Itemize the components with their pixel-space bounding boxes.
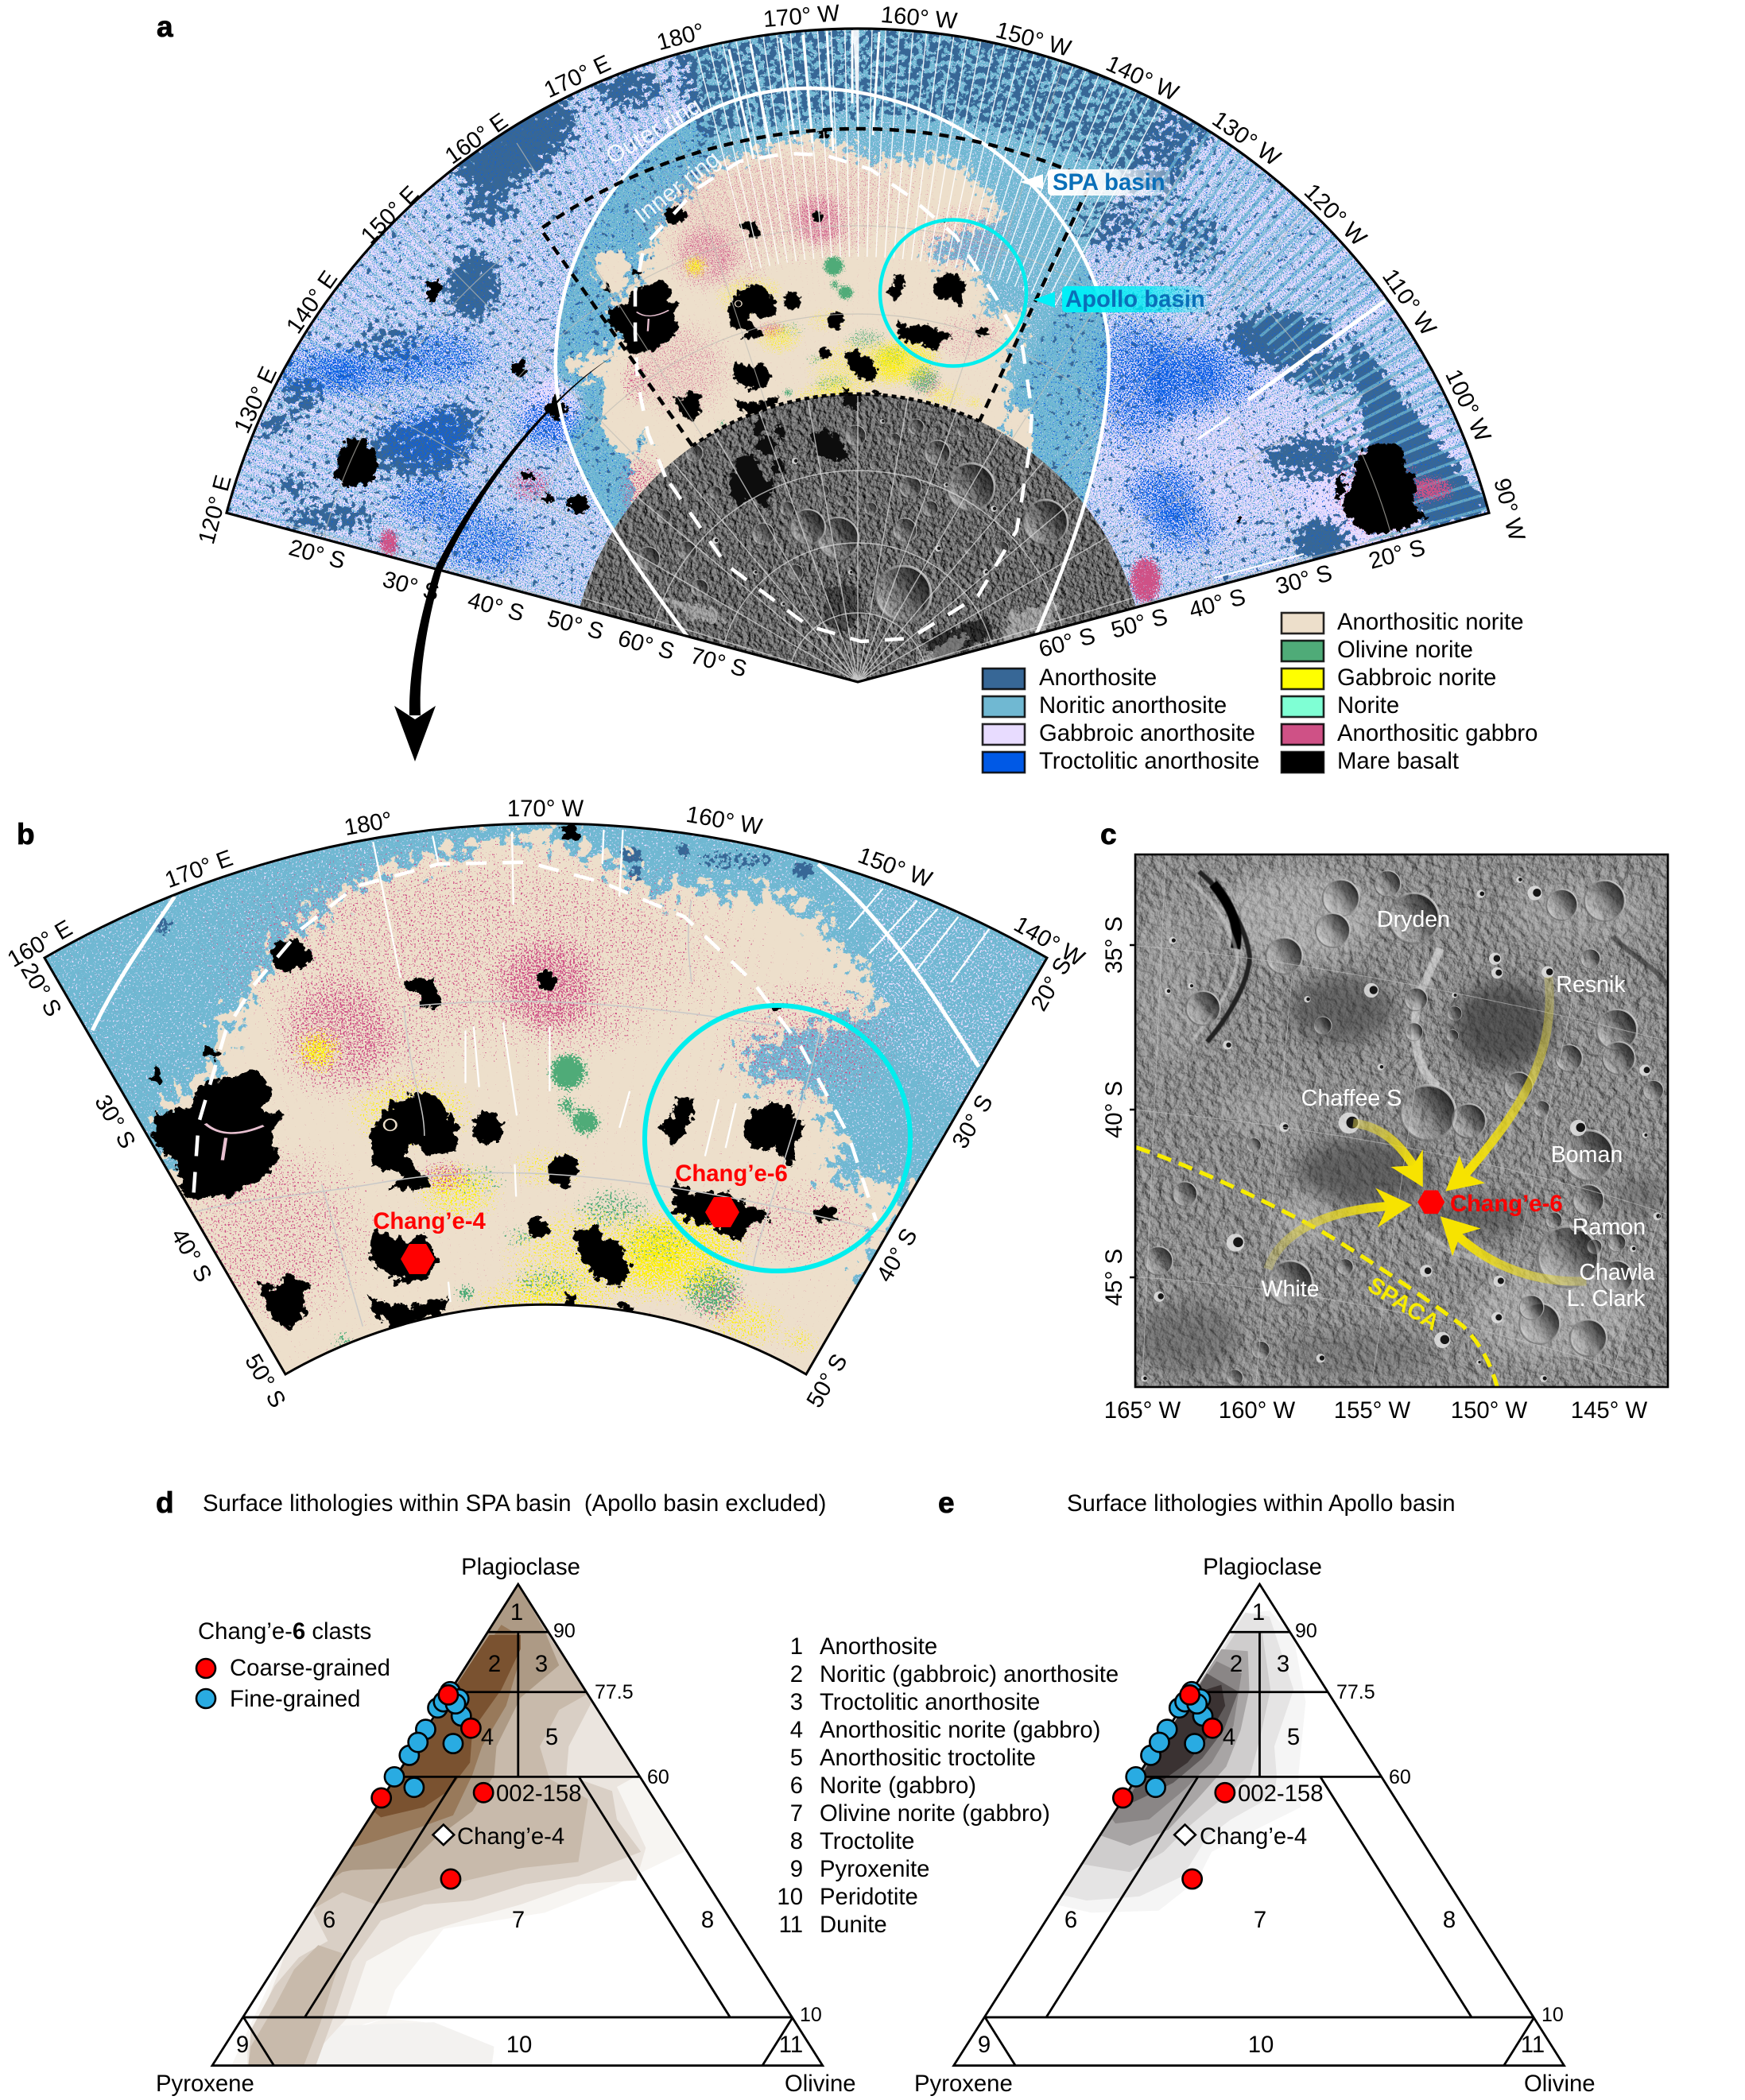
lithology number key: 10: [777, 1884, 803, 1910]
ternary labels d: Olivine: [785, 2071, 856, 2097]
lithology number key: Noritic (gabbroic) anorthosite: [820, 1661, 1119, 1687]
ternary labels d: 002-158: [496, 1780, 582, 1807]
lithology number key: 9: [790, 1856, 803, 1882]
longitude axis c: 165° W: [1104, 1397, 1181, 1424]
panel label e and title: [938, 1486, 1456, 1519]
ternary labels e: 5: [1287, 1724, 1300, 1750]
legend: Anorthositic norite: [1337, 609, 1523, 635]
fan outline: [227, 29, 1489, 682]
legend: Gabbroic norite: [1337, 664, 1496, 691]
longitude labels b: [3, 796, 1089, 973]
latitude axis c: 35° S: [1101, 916, 1127, 974]
ternary labels d: Pyroxene: [156, 2071, 254, 2097]
inner ring and graticule in b: [92, 830, 989, 1327]
latitude axis c: 45° S: [1101, 1249, 1127, 1306]
frame c: [1135, 854, 1668, 1387]
ternary labels e: 7: [1254, 1907, 1266, 1933]
Apollo basin circle b: [645, 1005, 910, 1271]
longitude labels: 140° E: [281, 266, 343, 339]
panel label c: c: [1100, 818, 1117, 850]
panel a: lithology fan map: [157, 5, 1538, 774]
latitude labels b: 20° S: [15, 959, 67, 1021]
ternary labels d: 10: [506, 2032, 532, 2058]
SPA study-region dashed box: [541, 129, 1092, 446]
longitude labels b: 180°: [342, 807, 394, 841]
legend: Mare basalt: [1337, 748, 1459, 774]
Chang'e-4 site: Chang’e-4: [373, 1208, 487, 1234]
crater names: L. Clark: [1567, 1286, 1646, 1312]
ternary labels d: 8: [701, 1907, 714, 1933]
ternary labels e: 9: [978, 2032, 991, 2058]
longitude labels: 90° W: [1488, 475, 1530, 544]
latitude labels b: 40° S: [871, 1224, 923, 1287]
ternary labels e: [914, 1554, 1596, 2097]
panel e: ternary diagram Apollo: [914, 1486, 1596, 2097]
ternary labels d: [156, 1554, 856, 2097]
longitude labels: 110° W: [1377, 264, 1441, 341]
crater names: Boman: [1551, 1142, 1623, 1168]
SPACA boundary: [1136, 1147, 1497, 1386]
dome dashed rim: [692, 394, 979, 446]
crater names: Dryden: [1377, 907, 1450, 932]
inner ring (white dashed): [635, 153, 1032, 641]
map fan: [228, 30, 1487, 680]
ternary labels d: 9: [236, 2032, 249, 2058]
crater names: [1261, 907, 1655, 1312]
panel label d and title: Surface lithologies within SPA basin (Apollo basin excluded): [203, 1490, 826, 1517]
ternary labels e: 90: [1295, 1620, 1317, 1642]
lithology number key: 7: [790, 1800, 803, 1827]
latitude labels: 20° S: [1366, 534, 1428, 575]
latitude labels: 40° S: [1186, 583, 1248, 624]
longitude labels b: 140° W: [1010, 911, 1089, 972]
ring labels: Inner ring: [630, 145, 725, 229]
latitude labels b: [15, 953, 1077, 1412]
ternary labels d: 77.5: [595, 1681, 634, 1703]
latitude labels: 50° S: [1108, 603, 1170, 644]
panel label e and title: e: [938, 1486, 955, 1519]
latitude labels: 70° S: [688, 642, 750, 683]
ternary labels d: 11: [779, 2032, 803, 2058]
lithology number key: 11: [779, 1912, 803, 1938]
ring labels: [601, 92, 725, 229]
legend: Noritic anorthosite: [1039, 692, 1227, 719]
longitude labels: 120° E: [193, 472, 237, 547]
ternary labels e: 10: [1541, 2004, 1564, 2026]
shared map core (also re-used in panel a): [65, 826, 1026, 1509]
clast legend: Coarse-grained: [230, 1655, 390, 1681]
ternary labels d: 10: [800, 2004, 822, 2026]
lithology number key: 6: [790, 1773, 803, 1799]
graticule: [286, 63, 1431, 606]
longitude axis c: 160° W: [1219, 1397, 1296, 1424]
ternary labels d: Chang’e-4: [457, 1823, 564, 1850]
lithology number key: 1: [790, 1633, 803, 1660]
longitude labels: 160° W: [880, 2, 959, 34]
latitude labels: 30° S: [380, 566, 442, 606]
ternary labels e: Chang’e-4: [1200, 1823, 1307, 1850]
ternary frame e: [954, 1584, 1564, 2066]
ternary labels e: 10: [1248, 2032, 1274, 2058]
crater names: White: [1261, 1277, 1320, 1302]
swath white lines: [317, 30, 1398, 1222]
legend: Troctolitic anorthosite: [1039, 748, 1259, 774]
Chang'e-6 site marker c: [1417, 1191, 1444, 1214]
ternary labels e: 2: [1230, 1651, 1243, 1677]
ternary labels d: 4: [481, 1724, 494, 1750]
lithology number key: Anorthositic norite (gabbro): [820, 1717, 1100, 1743]
latitude labels b: 20° S: [1026, 953, 1077, 1016]
grey density contours: [1056, 1610, 1305, 1912]
Chang'e-6 label c: Chang’e-6: [1450, 1191, 1563, 1217]
panel label e and title: Surface lithologies within Apollo basin: [1067, 1490, 1456, 1517]
ternary frame d: [212, 1584, 823, 2066]
longitude labels b: 170° E: [161, 845, 236, 893]
longitude labels: 150° W: [993, 17, 1074, 62]
latitude labels: 30° S: [1273, 560, 1335, 600]
ternary labels d: 1: [510, 1599, 523, 1625]
panel b: zoomed lithology map: [0, 795, 1113, 1509]
Chang'e-4 site: [373, 1208, 487, 1274]
sector outline b: [45, 823, 1047, 1374]
legend: Norite: [1337, 692, 1399, 719]
longitude labels b: 160° E: [3, 915, 77, 973]
latitude labels b: 40° S: [165, 1224, 217, 1287]
lithology number key: Olivine norite (gabbro): [820, 1800, 1050, 1827]
latitude labels b: 30° S: [947, 1091, 999, 1153]
longitude axis c: [1104, 1397, 1648, 1424]
ternary labels e: 3: [1277, 1651, 1289, 1677]
latitude labels: 20° S: [286, 534, 348, 575]
ternary labels d: 7: [512, 1907, 525, 1933]
lithology number key: Troctolitic anorthosite: [820, 1689, 1040, 1715]
outer ring (white solid): [556, 88, 1109, 636]
latitude axis c: [1101, 916, 1135, 1306]
lithology number key: [777, 1633, 1119, 1938]
latitude labels b: 50° S: [239, 1350, 291, 1412]
lithology number key: Peridotite: [820, 1884, 918, 1910]
ternary labels d: 60: [647, 1766, 669, 1788]
panel label d and title: d: [156, 1486, 174, 1519]
longitude labels: 180°: [654, 18, 708, 56]
SPACA label: SPACA: [1363, 1273, 1444, 1336]
lithology number key: Anorthosite: [820, 1633, 937, 1660]
lithology number key: Pyroxenite: [820, 1856, 929, 1882]
longitude labels: 170° E: [540, 50, 615, 103]
lithology number key: 4: [790, 1717, 803, 1743]
clast markers e: [1113, 1682, 1235, 1889]
ternary labels e: Pyroxene: [914, 2071, 1013, 2097]
longitude labels b: 170° W: [507, 796, 584, 822]
ternary labels e: Olivine: [1524, 2071, 1596, 2097]
longitude axis c: 145° W: [1571, 1397, 1648, 1424]
longitude labels: [193, 0, 1530, 547]
latitude labels: 50° S: [545, 605, 607, 645]
Apollo basin callout: Apollo basin: [1065, 286, 1205, 312]
clast legend: Chang’e-6 clasts: [198, 1618, 371, 1645]
ternary labels e: Plagioclase: [1203, 1554, 1322, 1580]
ternary labels e: 60: [1389, 1766, 1411, 1788]
latitude labels: 60° S: [615, 625, 677, 665]
legend: Anorthositic gabbro: [1337, 720, 1538, 746]
longitude axis c: 155° W: [1334, 1397, 1411, 1424]
ternary labels e: 11: [1521, 2032, 1545, 2058]
lithology number key: 2: [790, 1661, 803, 1687]
brown density contours: [231, 1584, 684, 2066]
latitude axis c: 40° S: [1101, 1081, 1127, 1138]
ternary labels e: 6: [1064, 1907, 1077, 1933]
ternary labels e: 1: [1252, 1599, 1265, 1625]
panel d: ternary diagram SPA: [156, 1486, 856, 2097]
yellow flow arrows: [1268, 977, 1586, 1281]
clast legend: [196, 1618, 390, 1712]
longitude labels: 130° W: [1208, 106, 1285, 172]
ternary labels e: 8: [1443, 1907, 1456, 1933]
south-pole grey imagery dome: [580, 394, 1135, 680]
lithology number key: 3: [790, 1689, 803, 1715]
ternary labels e: 002-158: [1238, 1780, 1324, 1807]
map sector: [0, 795, 1113, 1509]
crater names: Chawla: [1579, 1260, 1655, 1285]
legend: Anorthosite: [1039, 664, 1157, 691]
lithology number key: Dunite: [820, 1912, 887, 1938]
panel label a: a: [157, 10, 173, 43]
Apollo basin circle: [880, 219, 1026, 366]
grey terrain image: [1134, 854, 1668, 1387]
lithology number key: 8: [790, 1828, 803, 1854]
longitude labels: 160° E: [440, 108, 513, 169]
longitude labels: 170° W: [762, 0, 841, 33]
lat/lon grid: [1135, 854, 1668, 1386]
ternary labels e: 77.5: [1336, 1681, 1375, 1703]
arrow from a to b: [394, 355, 615, 761]
legend: Gabbroic anorthosite: [1039, 720, 1255, 746]
longitude labels b: 150° W: [855, 842, 936, 893]
clast markers d: [372, 1682, 493, 1889]
lithology number key: 5: [790, 1745, 803, 1771]
panel label b: b: [17, 818, 35, 850]
crater names: Chaffee S: [1301, 1086, 1402, 1111]
ring labels: Outer ring: [601, 92, 706, 169]
Chang'e-6 site: Chang’e-6: [675, 1160, 788, 1187]
ternary labels e: 4: [1223, 1724, 1235, 1750]
lithology number key: Troctolite: [820, 1828, 914, 1854]
longitude labels b: 160° W: [684, 801, 765, 840]
crater names: Resnik: [1556, 972, 1626, 998]
lithology number key: Norite (gabbro): [820, 1773, 976, 1799]
SPA basin callout: SPA basin: [1053, 169, 1165, 196]
longitude labels: 120° W: [1299, 179, 1372, 251]
ternary labels d: 90: [553, 1620, 576, 1642]
clast legend: Fine-grained: [230, 1686, 360, 1712]
longitude labels: 130° E: [229, 362, 282, 437]
longitude axis c: 150° W: [1451, 1397, 1528, 1424]
longitude labels: 100° W: [1440, 366, 1496, 446]
legend: Olivine norite: [1337, 637, 1473, 663]
ternary labels d: 3: [535, 1651, 548, 1677]
latitude labels b: 30° S: [89, 1091, 141, 1153]
Chang'e-6 site: [675, 1160, 788, 1227]
ternary labels d: 2: [488, 1651, 501, 1677]
ternary labels d: 6: [323, 1907, 335, 1933]
legend: [983, 609, 1538, 774]
longitude labels: 150° E: [355, 180, 424, 249]
latitude labels: 40° S: [465, 587, 527, 627]
latitude labels: [286, 534, 1428, 683]
latitude labels: 60° S: [1036, 622, 1098, 663]
ternary labels d: 5: [545, 1724, 558, 1750]
lithology number key: Anorthositic troctolite: [820, 1745, 1036, 1771]
latitude labels b: 50° S: [801, 1350, 853, 1412]
crater names: Ramon: [1572, 1215, 1646, 1240]
ternary labels d: Plagioclase: [461, 1554, 580, 1580]
panel c: landing-site imagery: [1100, 818, 1668, 1424]
longitude labels: 140° W: [1102, 50, 1183, 107]
